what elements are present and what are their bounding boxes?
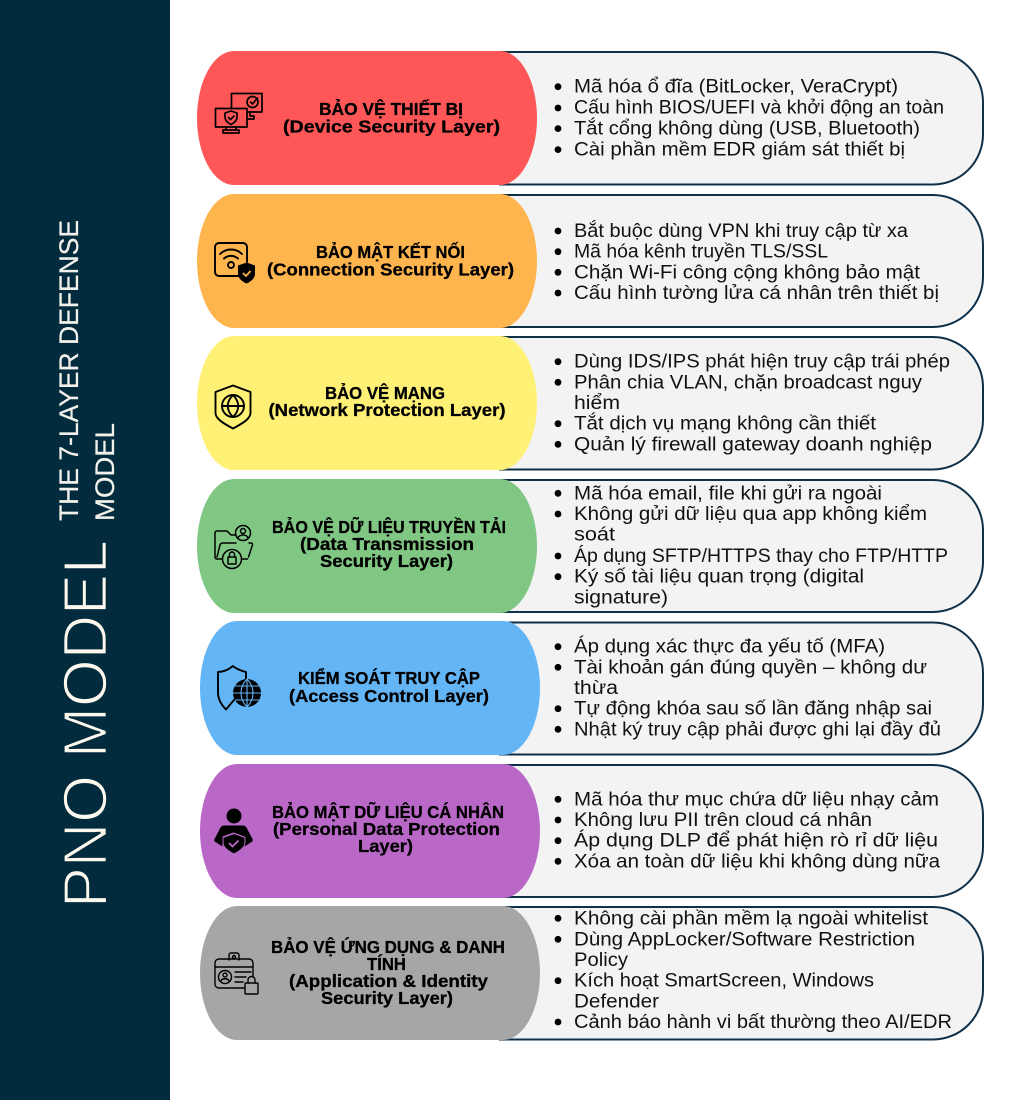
bullet list 5: Áp dụng xác thực đa yếu tố (MFA) <box>574 637 885 658</box>
bullet list 3: Quản lý firewall gateway doanh nghiệp <box>574 434 932 455</box>
detail panel 3 <box>500 337 983 470</box>
heading 7: BẢO VỆ ỨNG DỤNG & DANH <box>271 936 505 957</box>
bullet list 3 <box>555 352 950 455</box>
pill 7 <box>200 906 540 1040</box>
heading 6: BẢO MẬT DỮ LIỆU CÁ NHÂN <box>272 801 504 822</box>
heading 5: KIỂM SOÁT TRUY CẬP <box>298 667 480 688</box>
heading 4: Security Layer) <box>320 551 453 571</box>
bullet list 7: Kích hoạt SmartScreen, Windows <box>574 971 874 992</box>
bullet list 3: hiểm <box>574 393 620 414</box>
icon: ID badge with lock <box>215 953 258 994</box>
subtitle: THE 7-LAYER DEFENSE <box>54 220 84 521</box>
icon: wifi with shield <box>215 243 255 284</box>
layer 6: personal data <box>200 764 983 898</box>
heading 6: Layer) <box>358 836 413 856</box>
heading 4: BẢO VỆ DỮ LIỆU TRUYỀN TẢI <box>272 516 506 537</box>
heading 2: BẢO MẬT KẾT NỐI <box>316 241 465 262</box>
icon: monitors with shield <box>216 94 262 133</box>
icon: folder with user and lock <box>215 526 253 568</box>
bullet list 7: Policy <box>574 950 629 971</box>
bullet list 6: Xóa an toàn dữ liệu khi không dùng nữa <box>574 851 940 872</box>
icon: shield with globe <box>216 386 250 428</box>
heading 1 <box>283 98 500 136</box>
bullet list 5: thừa <box>574 678 618 699</box>
bullet list 1: Tắt cổng không dùng (USB, Bluetooth) <box>574 118 920 140</box>
heading 5 <box>289 667 489 706</box>
pill 1 <box>197 51 537 185</box>
bullet list 1 <box>555 77 944 160</box>
heading 5: (Access Control Layer) <box>289 686 489 706</box>
bullet list 2: Mã hóa kênh truyền TLS/SSL <box>574 242 828 263</box>
detail panel 4 <box>500 480 983 612</box>
detail panel 6 <box>500 765 983 897</box>
icon: shield with filled globe <box>218 666 261 710</box>
heading 1: BẢO VỆ THIẾT BỊ <box>319 98 463 119</box>
bullet list 1: Cấu hình BIOS/UEFI và khởi động an toàn <box>574 98 944 118</box>
bullet list 3: Phân chia VLAN, chặn broadcast nguy <box>574 372 923 393</box>
bullet list 7: Cảnh báo hành vi bất thường theo AI/EDR <box>574 1012 952 1033</box>
bullet list 4: Không gửi dữ liệu qua app không kiểm <box>574 504 927 525</box>
bullet list 5: Tài khoản gán đúng quyền – không dư <box>574 657 927 678</box>
subtitle <box>54 220 120 521</box>
bullet list 4: Mã hóa email, file khi gửi ra ngoài <box>574 483 882 504</box>
heading 3: BẢO VỆ MẠNG <box>325 382 445 403</box>
detail panel 1 <box>500 52 983 184</box>
layer 3: network protection <box>197 336 983 470</box>
bullet list 7: Dùng AppLocker/Software Restriction <box>574 929 915 950</box>
pill 6 <box>200 764 540 898</box>
heading 7: Security Layer) <box>321 988 453 1008</box>
bullet list 3: Tắt dịch vụ mạng không cần thiết <box>574 413 877 435</box>
pill 2 <box>197 194 537 328</box>
bullet list 4: Ký số tài liệu quan trọng (digital <box>574 567 864 588</box>
bullet list 2: Bắt buộc dùng VPN khi truy cập từ xa <box>574 220 908 242</box>
layer 7: application and identity <box>200 906 983 1040</box>
layer 4: data transmission <box>197 479 983 613</box>
bullet list 5: Nhật ký truy cập phải được ghi lại đầy đủ <box>574 719 941 740</box>
heading 7: (Application & Identity <box>289 971 488 991</box>
detail panel 2 <box>500 195 983 327</box>
heading 2 <box>267 241 514 280</box>
bullet list 1: Mã hóa ổ đĩa (BitLocker, VeraCrypt) <box>574 77 898 98</box>
bullet list 6: Mã hóa thư mục chứa dữ liệu nhạy cảm <box>574 789 939 810</box>
pill 4 <box>197 479 537 613</box>
bullet list 4 <box>555 483 948 608</box>
bullet list 7: Không cài phần mềm lạ ngoài whitelist <box>574 908 929 929</box>
bullet list 4: signature) <box>574 587 668 608</box>
layer 1: device security <box>197 51 983 185</box>
heading 1: (Device Security Layer) <box>283 116 500 136</box>
bullet list 2: Cấu hình tường lửa cá nhân trên thiết bị <box>574 283 939 304</box>
pill 5 <box>200 621 540 755</box>
heading 2: (Connection Security Layer) <box>267 260 514 280</box>
icon: person holding shield <box>214 808 253 854</box>
detail panel 7 <box>500 907 983 1040</box>
bullet list 5 <box>555 637 941 740</box>
heading 4 <box>272 516 506 571</box>
bullet list 1: Cài phần mềm EDR giám sát thiết bị <box>574 140 905 160</box>
heading 7: TÍNH <box>367 953 406 974</box>
heading 6: (Personal Data Protection <box>273 819 500 839</box>
main title: PNO MODEL <box>52 540 120 908</box>
layer 5: access control <box>200 621 983 755</box>
bullet list 5: Tự động khóa sau số lần đăng nhập sai <box>574 699 932 720</box>
bullet list 6: Không lưu PII trên cloud cá nhân <box>574 810 872 831</box>
pill 3 <box>197 336 537 470</box>
layer 2: connection security <box>197 194 983 328</box>
bullet list 3: Dùng IDS/IPS phát hiện truy cập trái phép <box>574 352 950 373</box>
bullet list 6 <box>555 789 940 872</box>
heading 6 <box>272 801 504 856</box>
bullet list 7 <box>555 908 952 1033</box>
bullet list 6: Áp dụng DLP để phát hiện rò rỉ dữ liệu <box>574 831 938 852</box>
heading 4: (Data Transmission <box>300 534 474 554</box>
bullet list 2: Chặn Wi-Fi công cộng không bảo mật <box>574 262 921 283</box>
bullet list 4: soát <box>574 525 616 546</box>
heading 3: (Network Protection Layer) <box>268 400 506 420</box>
bullet list 2 <box>555 220 939 304</box>
bullet list 7: Defender <box>574 991 660 1012</box>
detail panel 5 <box>500 622 983 754</box>
bullet list 4: Áp dụng SFTP/HTTPS thay cho FTP/HTTP <box>574 546 948 567</box>
sidebar <box>0 0 170 1100</box>
heading 7 <box>271 936 505 1008</box>
heading 3 <box>268 382 506 420</box>
subtitle: MODEL <box>90 423 120 521</box>
